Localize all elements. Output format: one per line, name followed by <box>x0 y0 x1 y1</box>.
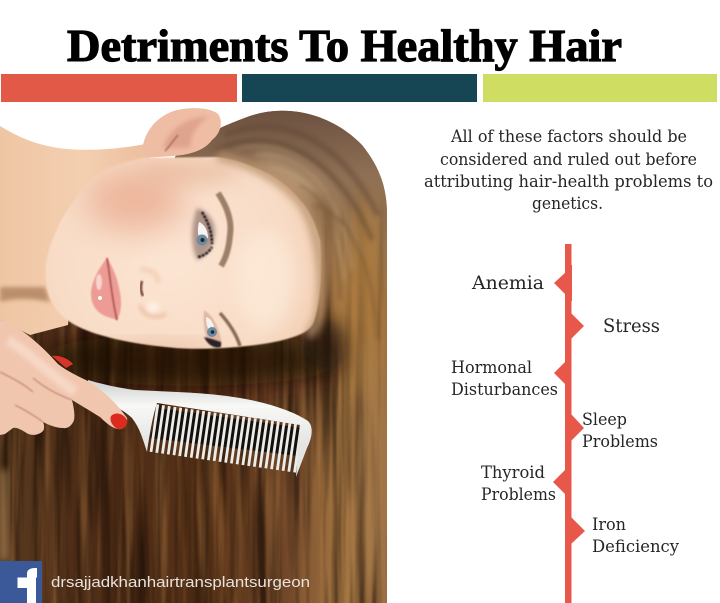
soft hairline <box>217 156 322 336</box>
arrow: hormonal disturbances <box>554 361 571 385</box>
photo: woman with long hair and comb <box>0 100 387 603</box>
facebook badge <box>0 561 42 603</box>
label: hormonal disturbances: Hormonal <box>451 358 532 378</box>
lips <box>91 258 121 320</box>
label: thyroid problems: Problems <box>481 485 556 505</box>
colour bars <box>1 74 717 102</box>
label: thyroid problems: Thyroid <box>481 463 545 483</box>
label: sleep problems: Sleep <box>582 410 627 430</box>
intro paragraph <box>424 127 713 214</box>
hand <box>0 320 127 435</box>
label: anemia: Anemia <box>471 272 544 294</box>
face <box>46 156 322 355</box>
facebook handle: drsajjadkhanhairtransplantsurgeon <box>51 574 310 591</box>
lower eye and brow <box>204 310 240 348</box>
label: stress: Stress <box>603 315 660 337</box>
neck and shoulder <box>0 126 160 335</box>
label: sleep problems: Problems <box>582 432 658 452</box>
timeline spine <box>565 244 572 603</box>
label: thyroid problems <box>481 463 556 505</box>
combed strands on crown <box>215 127 378 340</box>
red nail <box>110 413 127 429</box>
hair <box>0 100 387 603</box>
label: iron deficiency <box>592 515 679 557</box>
comb body <box>88 380 312 477</box>
arrow: iron deficiency <box>566 517 585 544</box>
label: hormonal disturbances <box>451 358 558 400</box>
intro paragraph: All of these factors should be <box>450 127 687 147</box>
arrow: sleep problems <box>566 414 584 441</box>
intro paragraph: genetics. <box>532 194 603 214</box>
label: hormonal disturbances: Disturbances <box>451 380 558 400</box>
label: iron deficiency: Deficiency <box>592 537 679 557</box>
arrow: thyroid problems <box>553 469 571 495</box>
ear <box>143 108 221 158</box>
title: Detriments To Healthy Hair <box>67 20 622 71</box>
nail behind finger <box>52 356 73 368</box>
intro paragraph: attributing hair-health problems to <box>424 172 713 192</box>
nose <box>140 270 166 317</box>
upper eye and brow <box>192 193 230 266</box>
comb teeth <box>153 428 300 449</box>
arrow: stress <box>566 313 584 339</box>
label: iron deficiency: Iron <box>592 515 626 535</box>
label: sleep problems <box>582 410 658 452</box>
comb tooth gaps <box>150 408 303 456</box>
arrow: anemia <box>554 265 572 301</box>
shoulder shadow <box>0 287 50 302</box>
comb <box>88 380 312 477</box>
intro paragraph: considered and ruled out before <box>440 150 697 170</box>
